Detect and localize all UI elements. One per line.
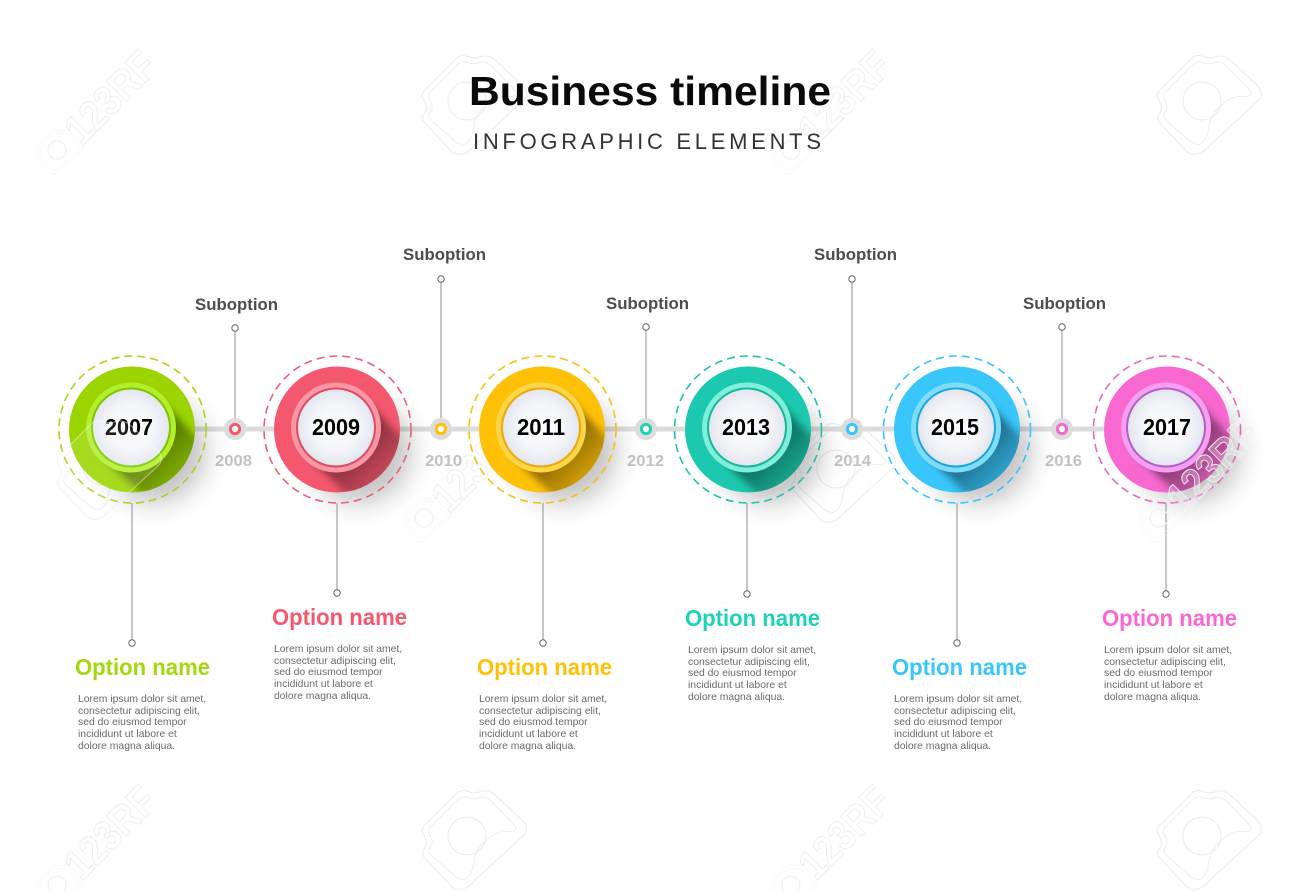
leader dot 2017 [1163, 591, 1169, 597]
drop shadow 2007 [102, 399, 206, 503]
long shadow 2009 [308, 399, 400, 492]
year 2009: 2009 [312, 414, 360, 440]
watermark: top-left logo: 123RF [55, 42, 166, 153]
description 2015: consectetur adipiscing elit, [894, 706, 1016, 717]
milestone 2008 [195, 295, 278, 470]
description 2011: Lorem ipsum dolor sit amet, [479, 694, 607, 705]
option name 2015: Option name [892, 654, 1027, 680]
description 2017: incididunt ut labore et [1104, 680, 1203, 691]
node 2008 [224, 418, 246, 440]
option 2015 [882, 355, 1043, 751]
main disc 2013 [685, 366, 811, 492]
node 2014 [841, 418, 863, 440]
main disc 2017 [1104, 366, 1230, 492]
connector 2008 [234, 331, 236, 420]
description 2007: consectetur adipiscing elit, [78, 706, 200, 717]
year 2017: 2017 [1143, 414, 1191, 440]
description 2015: Lorem ipsum dolor sit amet, [894, 694, 1022, 705]
description 2011: dolore magna aliqua. [479, 741, 576, 752]
description 2013: incididunt ut labore et [688, 680, 787, 691]
node 2012 [635, 418, 657, 440]
option name 2007: Option name [75, 654, 210, 680]
node 2016 [1051, 418, 1073, 440]
long shadow 2015 [928, 400, 1020, 492]
description 2013: consectetur adipiscing elit, [688, 657, 810, 668]
description 2017: dolore magna aliqua. [1104, 692, 1201, 703]
inner button 2011 [496, 382, 586, 472]
dashed ring 2011 [469, 356, 616, 503]
lead dot 2008 [232, 325, 238, 331]
option 2011 [468, 355, 628, 751]
leader line 2007 [131, 503, 133, 640]
node 2010 [430, 418, 452, 440]
long shadow 2017 [1138, 400, 1230, 492]
long shadow 2013 [721, 402, 811, 492]
inner button 2009 [291, 382, 381, 472]
long shadow 2007 [105, 401, 195, 492]
description 2009: Lorem ipsum dolor sit amet, [274, 644, 402, 655]
drop shadow 2009 [307, 399, 411, 503]
option 2009 [263, 355, 423, 701]
leader line 2013 [746, 503, 748, 591]
description 2017: sed do eiusmod tempor [1104, 668, 1213, 679]
drop shadow 2011 [512, 399, 616, 503]
description 2009: incididunt ut labore et [274, 679, 373, 690]
option name 2017: Option name [1102, 605, 1237, 631]
label Suboption 2016: Suboption [1023, 294, 1106, 313]
watermark overlay: egg over 2007 [57, 420, 162, 519]
year 2008: 2008 [215, 453, 252, 470]
leader line 2015 [956, 503, 958, 640]
leader dot 2009 [334, 590, 340, 596]
leader dot 2007 [129, 640, 135, 646]
lead dot 2016 [1059, 324, 1065, 330]
description 2007: dolore magna aliqua. [78, 741, 175, 752]
inner button 2015 [911, 382, 1001, 472]
leader line 2009 [336, 503, 338, 590]
watermark: top-center logo [771, 42, 900, 174]
leader line 2011 [542, 503, 544, 640]
drop shadow 2013 [718, 399, 822, 503]
drop shadow 2017 [1137, 399, 1241, 503]
lead dot 2014 [849, 276, 855, 282]
milestone 2010 [403, 245, 486, 470]
title: Business timeline [469, 68, 831, 114]
description 2009: sed do eiusmod tempor [274, 667, 383, 678]
watermark overlay: right logo over 2017 [1139, 410, 1268, 542]
description 2011: incididunt ut labore et [479, 729, 578, 740]
watermark: bottom-left logo: 123RF [55, 777, 166, 888]
main disc 2009 [274, 366, 400, 492]
watermark: middle-left egg [57, 420, 162, 519]
watermark: middle logo [404, 410, 533, 542]
label Suboption 2014: Suboption [814, 245, 897, 264]
milestone 2012 [606, 294, 689, 470]
description 2015: dolore magna aliqua. [894, 741, 991, 752]
description 2015: sed do eiusmod tempor [894, 717, 1003, 728]
milestone 2014 [814, 245, 897, 470]
subtitle: INFOGRAPHIC ELEMENTS [473, 129, 821, 154]
option 2017 [1092, 355, 1253, 702]
timeline axis [190, 426, 1115, 432]
dashed ring 2015 [884, 356, 1030, 503]
year 2007: 2007 [105, 414, 153, 440]
year 2013: 2013 [722, 414, 770, 440]
description 2013: dolore magna aliqua. [688, 692, 785, 703]
description 2013: sed do eiusmod tempor [688, 668, 797, 679]
dashed ring 2017 [1094, 356, 1240, 503]
dashed ring 2013 [674, 356, 822, 503]
watermark: bottom-center logo: 123RF [789, 777, 900, 888]
inner button 2013 [702, 382, 792, 472]
leader line 2017 [1165, 503, 1167, 591]
description 2009: consectetur adipiscing elit, [274, 656, 396, 667]
year 2014: 2014 [834, 453, 871, 470]
label Suboption 2008: Suboption [195, 295, 278, 314]
year 2010: 2010 [425, 453, 462, 470]
description 2011: consectetur adipiscing elit, [479, 706, 601, 717]
main disc 2015 [894, 366, 1020, 492]
description 2013: Lorem ipsum dolor sit amet, [688, 645, 816, 656]
connector 2016 [1061, 330, 1063, 420]
leader dot 2011 [540, 640, 546, 646]
option 2007 [58, 355, 218, 751]
description 2017: Lorem ipsum dolor sit amet, [1104, 645, 1232, 656]
connector 2010 [440, 282, 442, 420]
lead dot 2012 [643, 324, 649, 330]
watermark: top-center logo: 123RF [789, 42, 900, 153]
option name 2013: Option name [685, 605, 820, 631]
watermark: bottom egg [422, 790, 526, 889]
connector 2014 [851, 282, 853, 420]
drop shadow 2015 [927, 399, 1031, 503]
watermark: middle egg [791, 424, 896, 522]
description 2017: consectetur adipiscing elit, [1104, 657, 1226, 668]
description 2011: sed do eiusmod tempor [479, 717, 588, 728]
label Suboption 2012: Suboption [606, 294, 689, 313]
watermark overlay: right logo over 2017: 123RF [1157, 410, 1268, 521]
watermark: middle logo: 123RF [422, 410, 533, 521]
lead dot 2010 [438, 276, 444, 282]
description 2015: incididunt ut labore et [894, 729, 993, 740]
inner button 2007 [86, 382, 176, 472]
dashed ring 2009 [264, 356, 411, 503]
inner button 2017 [1121, 382, 1211, 472]
option name 2011: Option name [477, 654, 612, 680]
year 2015: 2015 [931, 414, 979, 440]
main disc 2011 [479, 366, 605, 492]
long shadow 2011 [513, 399, 605, 492]
watermark: bottom-right egg [1157, 790, 1262, 889]
watermark: top-left logo [37, 42, 166, 174]
milestone 2016 [1023, 294, 1106, 470]
option name 2009: Option name [272, 604, 407, 630]
connector 2012 [645, 330, 647, 420]
year 2016: 2016 [1045, 453, 1082, 470]
option 2013 [674, 355, 834, 702]
leader dot 2015 [954, 640, 960, 646]
year 2011: 2011 [517, 414, 565, 440]
dashed ring 2007 [59, 356, 206, 503]
description 2009: dolore magna aliqua. [274, 691, 371, 702]
description 2007: incididunt ut labore et [78, 729, 177, 740]
year 2012: 2012 [627, 453, 664, 470]
watermark: top-right egg [1157, 56, 1262, 154]
main disc 2007 [69, 366, 195, 492]
watermark: top egg [422, 56, 526, 154]
label Suboption 2010: Suboption [403, 245, 486, 264]
description 2007: sed do eiusmod tempor [78, 717, 187, 728]
description 2007: Lorem ipsum dolor sit amet, [78, 694, 206, 705]
leader dot 2013 [744, 591, 750, 597]
